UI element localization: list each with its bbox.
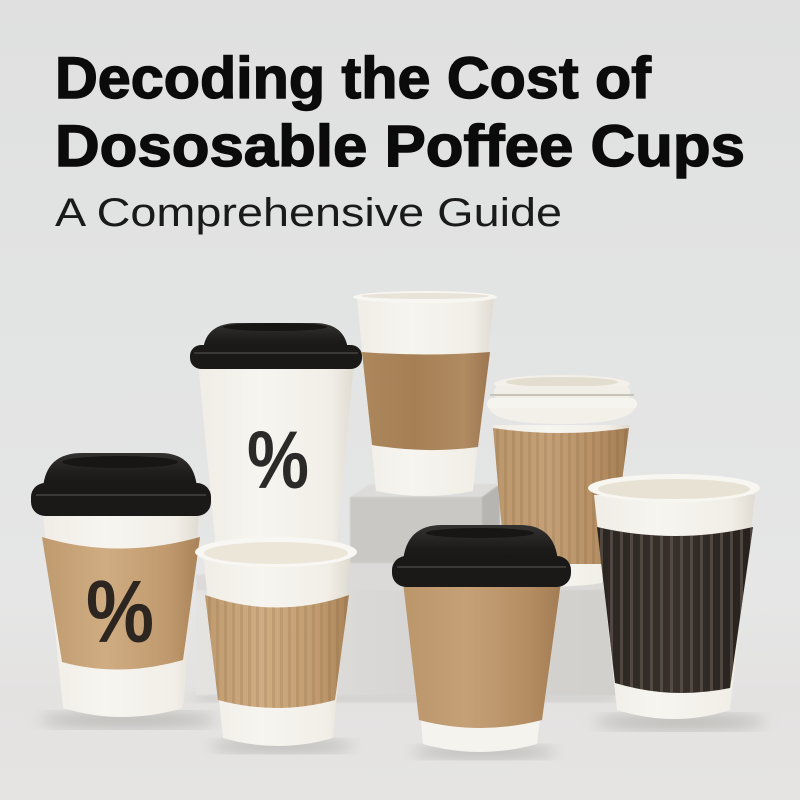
cup: front left with lid and percent sleeve	[31, 453, 216, 728]
cup: tall white with lid and percent	[190, 323, 362, 560]
title: Decoding the Cost of	[55, 46, 652, 111]
display plinths	[196, 484, 616, 702]
cup: back with kraft sleeve	[353, 291, 497, 496]
title	[55, 46, 745, 179]
title: Dososable Poffee Cups	[55, 114, 745, 179]
cup: front center kraft with lid	[392, 525, 571, 759]
cup: stacked ribbed	[487, 375, 637, 586]
subtitle: A Comprehensive Guide	[55, 191, 562, 235]
lid	[31, 453, 211, 516]
cup: front small with ribbed sleeve	[195, 537, 357, 753]
lid	[190, 323, 362, 369]
percent sign: %	[86, 562, 154, 661]
percent sign: %	[247, 415, 309, 506]
cup: right dark ribbed sleeve	[588, 474, 765, 730]
lid	[392, 525, 571, 587]
